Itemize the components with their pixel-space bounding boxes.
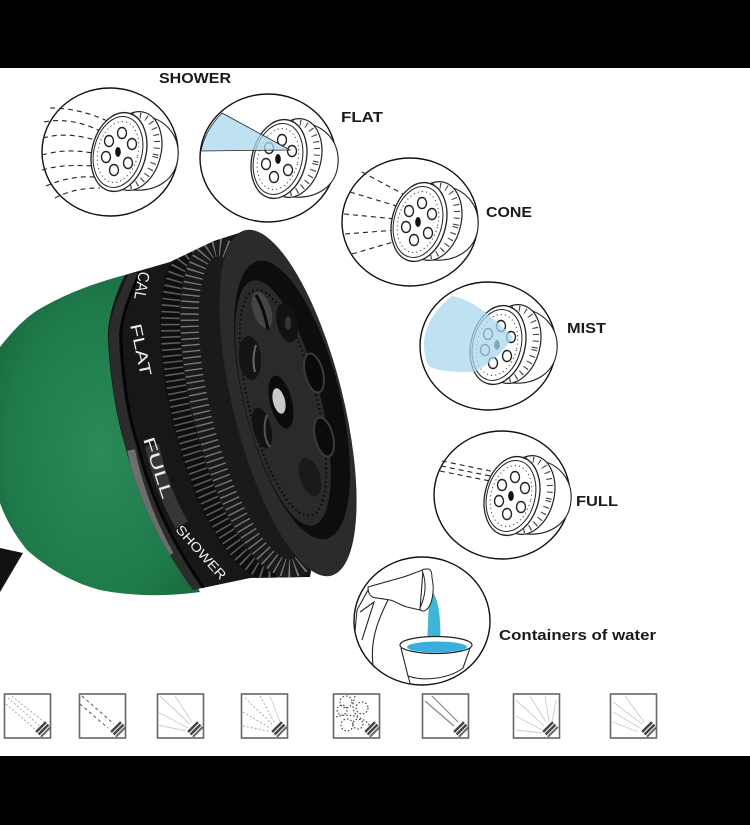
hose: [0, 548, 23, 592]
dial labels: [126, 270, 229, 583]
dial labels: FLAT: [126, 322, 154, 378]
icon: nozzle: [83, 106, 178, 197]
panel: shower mode: [42, 88, 178, 216]
icon: nozzle: [243, 113, 338, 204]
panel: mist mode: [420, 282, 557, 410]
black collar: [108, 232, 312, 590]
panel: cone mode: [342, 158, 478, 286]
jets: [252, 292, 272, 328]
heading: cone: CONE: [486, 205, 532, 221]
heading: shower: SHOWER: [159, 71, 232, 87]
main sprayer photo: [0, 230, 357, 596]
icon: bucket: [400, 636, 472, 690]
icon: pattern 1: [4, 694, 51, 738]
heading: containers of water: Containers of water: [499, 628, 656, 644]
ridged grip: [160, 244, 282, 578]
icon: flat spray: [201, 113, 290, 151]
top black bar: [0, 0, 750, 68]
icon: nozzle: [476, 450, 571, 541]
icon: pattern 4: [242, 694, 288, 738]
dial labels: CAL: [130, 270, 152, 301]
dial labels: FULL: [139, 435, 175, 501]
icon: mist spray: [424, 296, 513, 372]
icon: pattern 3: [158, 694, 204, 738]
nozzle face: [220, 230, 357, 576]
green body: [0, 275, 200, 595]
icon: pattern 6: [422, 694, 469, 738]
icon: pattern 2: [80, 694, 126, 738]
icon: pattern 5: [334, 694, 380, 738]
icon: water stream: [428, 593, 440, 636]
icon: hand and sprayer: [354, 569, 433, 665]
bottom black bar: [0, 756, 750, 825]
icon: pattern 7: [514, 694, 560, 738]
heading: mist: MIST: [567, 321, 606, 337]
icon: cone spray: [344, 172, 405, 254]
panel: containers of water: [354, 557, 490, 690]
panel: full mode: [434, 431, 571, 559]
bottom icons: spray patterns: [4, 694, 657, 738]
heading: full: FULL: [576, 494, 618, 510]
icon: nozzle: [383, 176, 478, 267]
icon: shower spray: [42, 108, 112, 198]
icon: full spray: [440, 461, 505, 484]
heading: flat: FLAT: [341, 110, 383, 126]
icon: nozzle: [462, 299, 557, 390]
dial labels: SHOWER: [173, 522, 229, 583]
panel: flat mode: [200, 94, 338, 222]
icon: pattern 8: [610, 694, 657, 738]
